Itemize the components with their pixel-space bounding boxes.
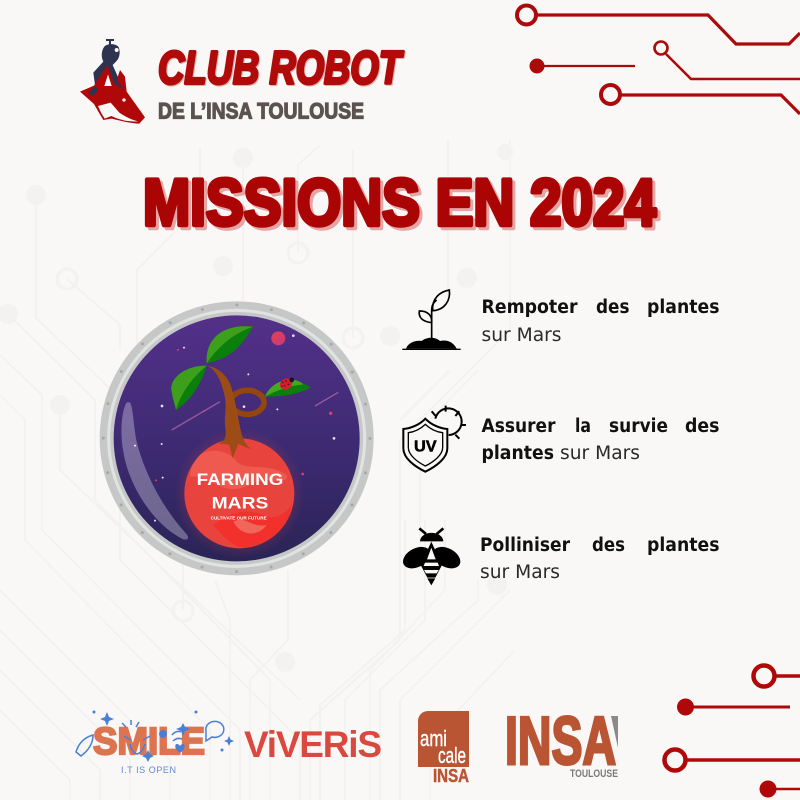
mission text: Assurer la survie des plantes sur Mars: survie [609, 416, 668, 437]
mission text: Assurer la survie des plantes sur Mars: des [685, 416, 720, 437]
Farming Mars badge [100, 301, 374, 575]
title: MISSIONS EN 2024 [143, 165, 656, 239]
mission text: Rempoter des plantes sur Mars: des [596, 297, 630, 318]
sponsor logo: Smile: SMILE [93, 721, 205, 763]
mission icon: sprout [402, 290, 461, 349]
window reflection [121, 402, 188, 540]
mission text: Polliniser des plantes sur Mars: des [592, 535, 625, 556]
mission text: Assurer la survie des plantes sur Mars: la [575, 416, 591, 437]
sponsor logo: Amicale INSA: cale [438, 743, 466, 768]
circuit decoration: bottom right [664, 666, 800, 798]
mission text: Assurer la survie des plantes sur Mars [482, 416, 720, 464]
mission icon: UV shield and sun: UV [414, 438, 437, 455]
mission text: Polliniser des plantes sur Mars [480, 535, 720, 583]
planet Mars: FARMING [197, 470, 283, 489]
mission text: Rempoter des plantes sur Mars [482, 297, 720, 346]
sponsor logo: Viveris: ViVERiS [244, 724, 382, 765]
sponsor logo: Smile [76, 710, 234, 775]
plant [171, 326, 311, 458]
sponsor logo: Amicale INSA [418, 711, 469, 786]
mission text: Polliniser des plantes sur Mars: plantes [647, 535, 720, 556]
mission text: Rempoter des plantes sur Mars: Rempoter [482, 297, 578, 318]
mission text: Polliniser des plantes sur Mars: sur Mars [480, 562, 560, 583]
mission text: Polliniser des plantes sur Mars: Polliniser [480, 535, 571, 556]
mission text: Rempoter des plantes sur Mars: sur Mars [482, 325, 562, 346]
mission text: Assurer la survie des plantes sur Mars: sur Mars [560, 443, 640, 464]
mission text: Assurer la survie des plantes sur Mars: plantes [482, 443, 554, 464]
planet Mars [174, 428, 304, 558]
mission text: Assurer la survie des plantes sur Mars: Assurer [482, 416, 556, 437]
ladybird [278, 376, 294, 392]
mission icon: UV shield and sun [403, 406, 466, 472]
mission text: Rempoter des plantes sur Mars: plantes [647, 297, 720, 318]
circuit decoration: top right [517, 6, 800, 114]
sponsor logo: Smile: I.T IS OPEN [121, 765, 176, 775]
logo subtitle: DE L’INSA TOULOUSE [158, 98, 364, 124]
mission icon: bee [399, 528, 464, 585]
planet Mars: MARS [212, 493, 268, 512]
sponsor logo: Amicale INSA: INSA [433, 766, 469, 786]
sponsor logo: INSA Toulouse [505, 703, 618, 780]
logo title: Club Robot: CLUB ROBOT [158, 42, 404, 94]
sponsor logo: INSA Toulouse: INSA [505, 703, 616, 779]
sponsor logo: INSA Toulouse: TOULOUSE [570, 768, 618, 780]
sponsor logo: Amicale INSA: ami [420, 726, 447, 751]
planet Mars: CULTIVATE OUR FUTURE [211, 516, 267, 521]
logo: fox and robot mascot [80, 40, 145, 124]
